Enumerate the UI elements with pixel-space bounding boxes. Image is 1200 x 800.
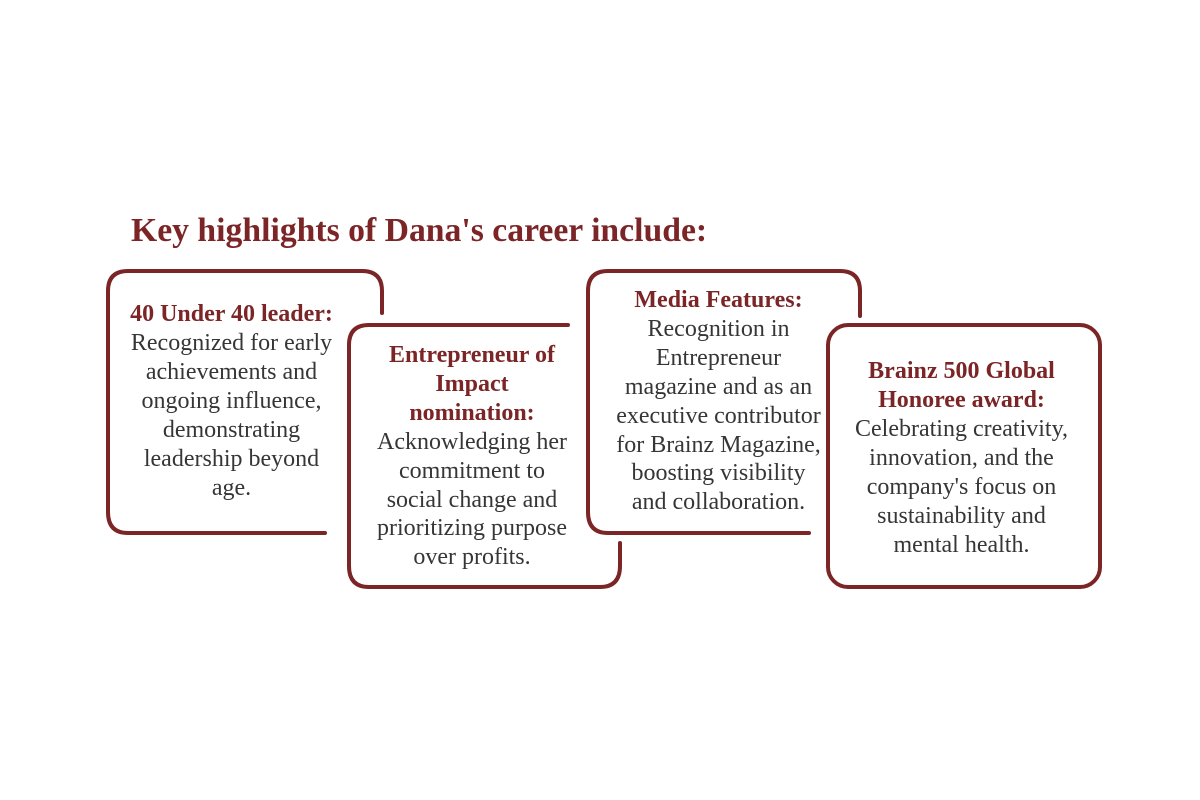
card 1 text: 40 Under 40 leader: xyxy=(130,301,333,327)
outline: card 1 xyxy=(108,271,382,533)
outline: card 3 xyxy=(588,271,860,533)
card 2 text: social change and xyxy=(387,487,557,513)
card 3 text: executive contributor xyxy=(616,403,821,429)
card 2 text: prioritizing purpose xyxy=(377,515,567,541)
card 3 text: magazine and as an xyxy=(625,374,812,400)
card 2 text: Acknowledging her xyxy=(377,429,567,455)
card 4 text: Honoree award: xyxy=(878,387,1045,413)
card 1 text: demonstrating xyxy=(163,417,300,443)
card 3 text: Media Features: xyxy=(634,287,803,313)
card 2 text: nomination: xyxy=(409,400,535,426)
outline: card 2 xyxy=(349,325,620,587)
card 4 text: innovation, and the xyxy=(869,445,1054,471)
card 4 text: Brainz 500 Global xyxy=(868,358,1055,384)
card 2 text: commitment to xyxy=(399,458,545,484)
outline: card 4 xyxy=(828,325,1100,587)
card 1 text: Recognized for early xyxy=(131,330,332,356)
card 4 text xyxy=(855,358,1068,558)
card 4 text: sustainability and xyxy=(877,503,1046,529)
card 3 text: and collaboration. xyxy=(632,489,805,515)
card 1 text xyxy=(130,301,333,501)
card 3 text: Entrepreneur xyxy=(656,345,781,371)
card 1 text: age. xyxy=(212,475,251,501)
card 1 text: ongoing influence, xyxy=(142,388,321,414)
card 3 text: for Brainz Magazine, xyxy=(616,432,821,458)
card 4 text: Celebrating creativity, xyxy=(855,416,1068,442)
card 1 text: leadership beyond xyxy=(144,446,319,472)
card 2 text: over profits. xyxy=(413,544,531,570)
card 3 text xyxy=(616,287,821,515)
card 2 text: Entrepreneur of xyxy=(389,342,555,368)
card 2 text xyxy=(377,342,567,570)
card 4 text: company's focus on xyxy=(867,474,1056,500)
card 3 text: boosting visibility xyxy=(631,460,806,486)
title: Key highlights of Dana's career include: xyxy=(131,212,707,249)
card 2 text: Impact xyxy=(435,371,509,397)
card 3 text: Recognition in xyxy=(648,316,789,342)
card 1 text: achievements and xyxy=(146,359,317,385)
card 4 text: mental health. xyxy=(894,532,1029,558)
